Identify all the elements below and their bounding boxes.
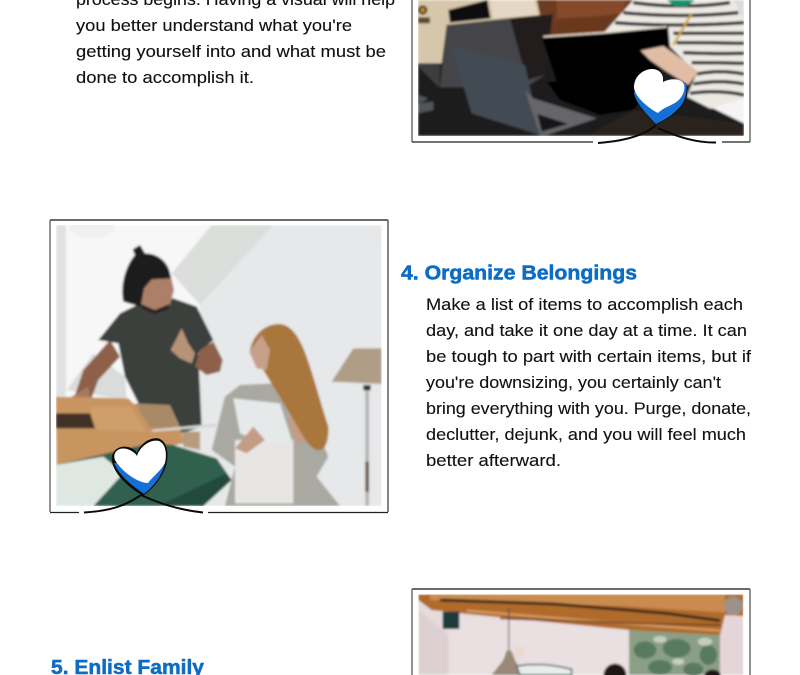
text block: step 3 description (continued): getting yourself into and what must be — [76, 42, 386, 61]
text block: step 4 description: better afterward. — [426, 451, 561, 470]
text block: step 4 description — [426, 295, 751, 470]
text block: step 3 description (continued): you better understand what you're — [76, 16, 352, 35]
text block: step 3 description (continued): done to accomplish it. — [76, 68, 254, 87]
text block: step 4 description: bring everything with you. Purge, donate, — [426, 399, 751, 418]
photo frame — [412, 589, 750, 675]
heading: step 4: 4. Organize Belongings — [401, 262, 637, 284]
panel: couple packing boxes photo — [50, 215, 388, 513]
text block: step 4 description: be tough to part with certain items, but if — [426, 347, 751, 366]
photo: couple with moving boxes — [56, 215, 382, 506]
text block: step 4 description: Make a list of items to accomplish each — [426, 295, 743, 314]
icon: heart with ribbon — [84, 438, 203, 512]
photo: people with laptops and notebook — [418, 0, 744, 136]
text block: step 4 description: declutter, dejunk, and you will feel much — [426, 425, 746, 444]
panel: family room photo — [412, 589, 750, 675]
text block: step 4 description: day, and take it one day at a time. It can — [426, 321, 747, 340]
photo frame with gap — [50, 220, 388, 512]
icon: heart with ribbon — [598, 69, 716, 143]
photo: room with timber beam — [418, 594, 743, 675]
panel: laptop and notebook photo — [412, 0, 750, 143]
text block: step 3 description (continued) — [76, 0, 395, 87]
photo frame with gap — [412, 0, 750, 142]
text block: step 4 description: you're downsizing, you certainly can't — [426, 373, 721, 392]
